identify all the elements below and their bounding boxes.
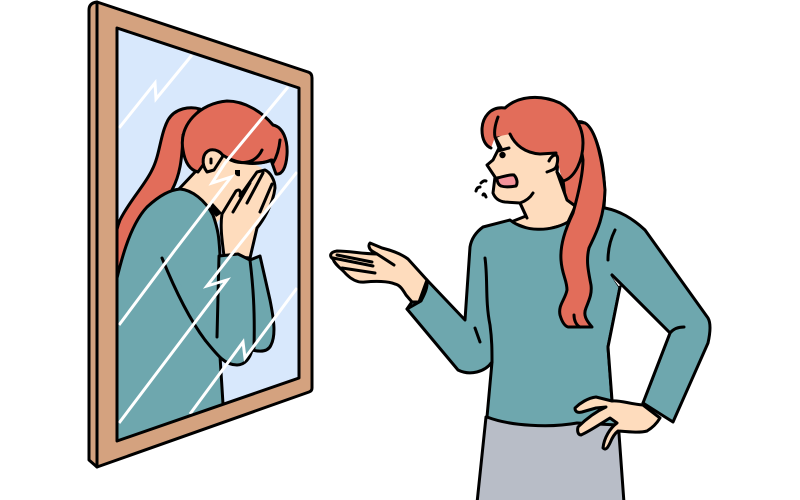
reflected neck line [179, 171, 196, 189]
ponytail [560, 122, 605, 327]
hair [482, 97, 583, 181]
reflected ear [203, 150, 223, 172]
shirt fold lines [475, 230, 684, 362]
shirt edges around gap [608, 275, 670, 403]
glass cracks [119, 55, 297, 423]
mirror [89, 2, 312, 467]
breath puffs [476, 181, 486, 197]
reflected sleeve [162, 254, 274, 365]
eye and brow [498, 148, 509, 158]
reflected hair [182, 101, 287, 174]
neck and face [487, 125, 578, 232]
mirror glass edge [117, 28, 299, 441]
ponytail back [563, 122, 605, 240]
illustration [88, 0, 712, 500]
mirror frame [89, 2, 312, 467]
reflected sleeve fold [250, 260, 254, 348]
reflected details [210, 140, 280, 217]
right hand [575, 397, 660, 449]
shirt [407, 207, 710, 426]
reflected body [118, 188, 224, 439]
ear [547, 155, 558, 172]
left cuff [407, 280, 427, 309]
reflected ponytail [118, 106, 202, 266]
ponytail strand [574, 315, 580, 327]
standing woman [331, 97, 710, 500]
mouth [497, 175, 517, 187]
left hand [331, 243, 427, 302]
reflected hands [221, 170, 275, 258]
skirt [477, 417, 624, 500]
jaw line [520, 193, 533, 218]
reflected face [182, 158, 262, 222]
mirror glass [117, 28, 299, 441]
reflection: crying woman [118, 54, 298, 439]
right sleeve gap [608, 277, 670, 402]
